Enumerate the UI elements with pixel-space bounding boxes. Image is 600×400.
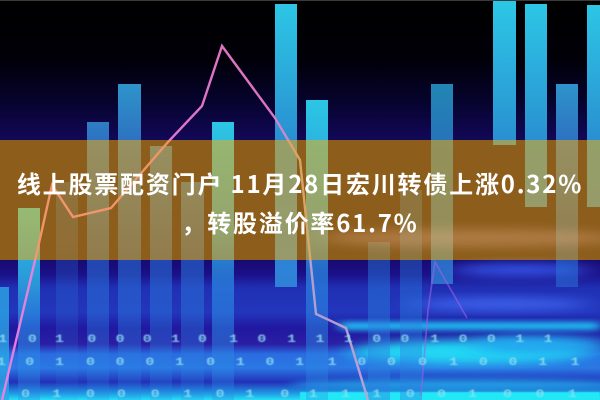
backing under title band [0,140,600,260]
faint secondary line [421,262,467,396]
main trend line [2,46,368,400]
top edge [0,0,600,1]
binary digit rows [0,333,580,400]
title [17,165,583,239]
binary digit rows: 10100010101110010011 [0,333,553,345]
title: ，转股溢价率61.7% [181,204,419,239]
binary digit rows: 010001010111001001 [21,388,577,400]
band highlight [320,229,600,247]
title: 线上股票配资门户 11月28日宏川转债上涨0.32% [17,165,583,200]
light streaks across lower area [290,263,600,400]
amber title band [0,140,600,260]
binary digit rows: 10100010101100010011 [0,356,580,368]
